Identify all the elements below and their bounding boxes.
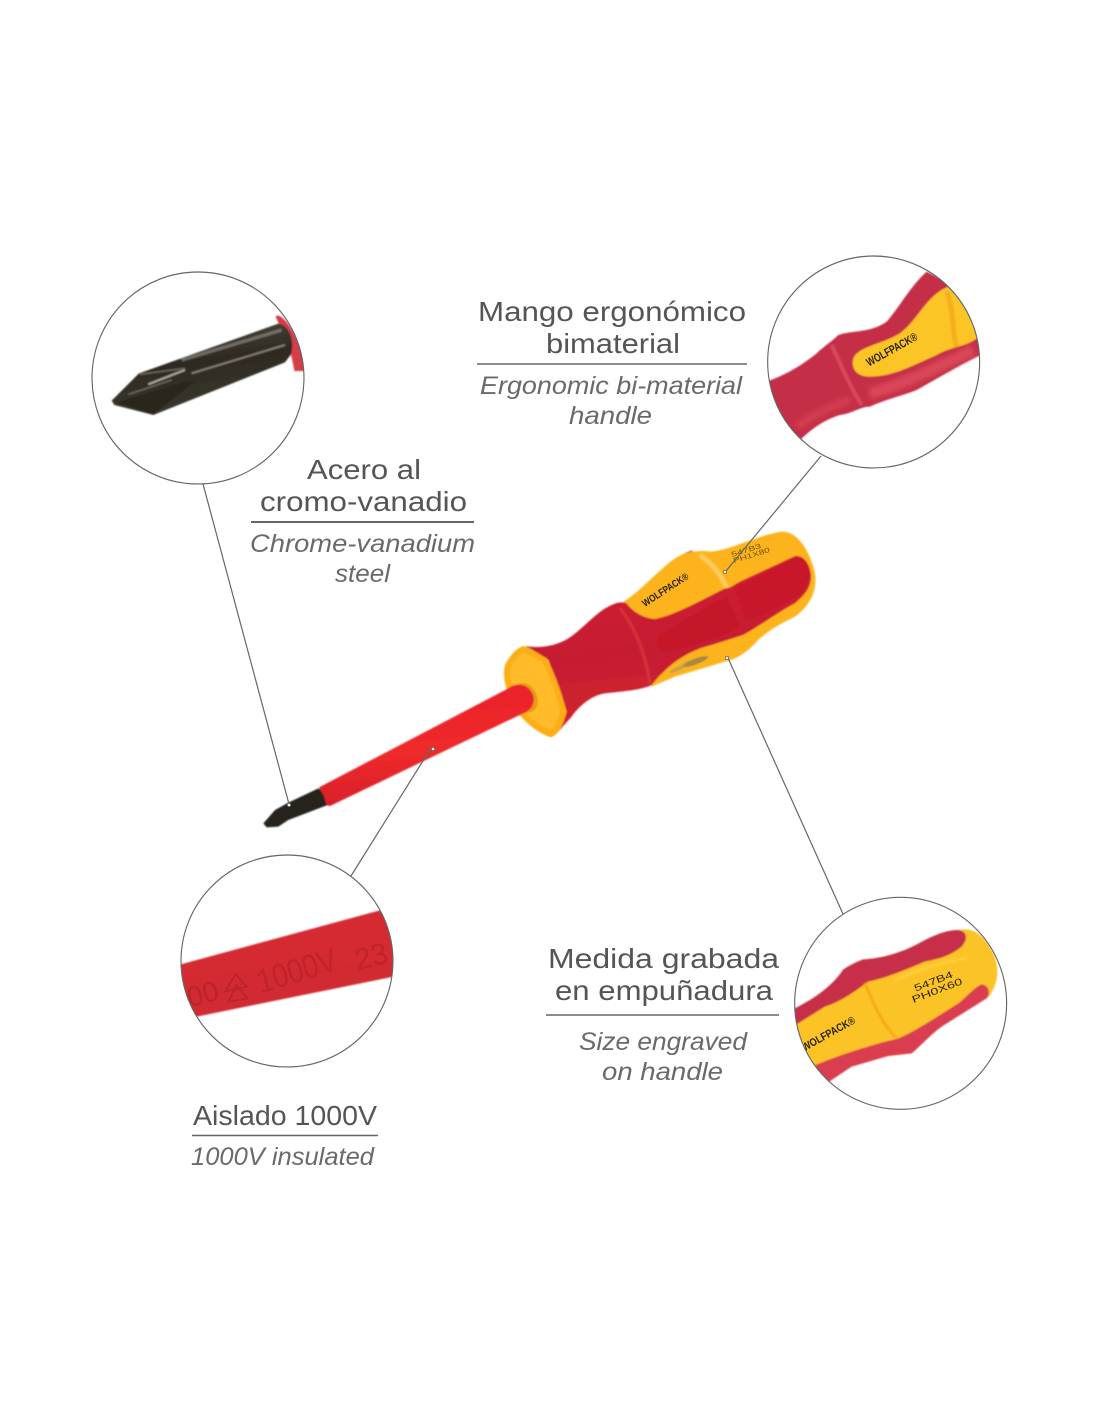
red handle body bbox=[770, 271, 979, 440]
attachment dots bbox=[287, 570, 729, 807]
Spanish heading: Acero al bbox=[307, 454, 421, 485]
leader line: steel tip bbox=[203, 484, 289, 804]
insulated red shaft bbox=[319, 685, 534, 806]
circle: steel tip close-up bbox=[92, 272, 308, 484]
steel bit bbox=[112, 324, 292, 415]
handle and collar bbox=[504, 532, 815, 737]
circle: insulation close-up bbox=[175, 855, 402, 1067]
size engraving on handle: 547B3 bbox=[731, 543, 762, 559]
Spanish heading line two: bimaterial bbox=[546, 328, 680, 359]
leader line: insulation bbox=[351, 748, 431, 876]
size engraving second line: PH1X80 bbox=[733, 547, 771, 565]
body crease bbox=[865, 983, 897, 1038]
caption: steel bbox=[250, 454, 475, 588]
Spanish heading: Medida grabada bbox=[548, 943, 779, 974]
English caption: Size engraved bbox=[579, 1028, 748, 1056]
size engraving second line: PH0X60 bbox=[910, 976, 964, 1006]
red tube bbox=[175, 909, 402, 1018]
top red sliver bbox=[663, 551, 702, 575]
Spanish heading: Aislado 1000V bbox=[193, 1100, 377, 1131]
lower left highlight bbox=[797, 400, 850, 427]
Spanish heading line two: cromo-vanadio bbox=[260, 486, 467, 517]
embossed voltage marking: 1000V bbox=[253, 942, 342, 1001]
engraved logo stamp bbox=[681, 654, 709, 669]
caption: engraved size bbox=[546, 943, 779, 1086]
collar face bbox=[510, 653, 560, 730]
English caption line two: steel bbox=[335, 560, 392, 588]
caption: handle bbox=[477, 296, 747, 430]
shaft socket shadow bbox=[509, 679, 542, 716]
shaft and tip bbox=[263, 685, 534, 827]
flute edge bbox=[128, 368, 185, 394]
red washer bbox=[276, 316, 308, 371]
leader line: engraved size bbox=[728, 658, 843, 914]
English caption: Chrome-vanadium bbox=[250, 530, 475, 558]
lower shine bbox=[192, 345, 285, 373]
caption: insulation bbox=[191, 1100, 378, 1171]
English caption line two: on handle bbox=[602, 1058, 723, 1086]
panel crease bbox=[947, 292, 957, 347]
English caption line two: handle bbox=[569, 402, 652, 430]
red handle and grip bbox=[525, 556, 811, 732]
brand text on handle: WOLFPACK® bbox=[641, 571, 692, 610]
screwdriver photo bbox=[263, 532, 815, 827]
top red band bbox=[795, 929, 967, 1025]
Spanish heading: Mango ergonómico bbox=[478, 296, 746, 327]
circle: handle close-up bbox=[767, 255, 980, 468]
ridge by panel bbox=[832, 345, 862, 405]
flute shadow bbox=[117, 382, 195, 414]
yellow body bbox=[623, 532, 815, 687]
embossed digits: 00 bbox=[184, 975, 222, 1014]
infographic canvas bbox=[91, 255, 1008, 1165]
upper shine bbox=[182, 330, 282, 360]
grip recess highlight bbox=[895, 958, 967, 980]
collar bbox=[504, 646, 567, 737]
flute gleam bbox=[148, 370, 185, 384]
English caption: 1000V insulated bbox=[191, 1143, 375, 1171]
brand text: WOLFPACK® bbox=[864, 330, 920, 369]
brand text: WOLFPACK® bbox=[800, 1015, 858, 1054]
middle grip shading bbox=[657, 596, 740, 652]
Spanish heading line two: en empuñadura bbox=[555, 975, 773, 1006]
size engraving: 547B4 bbox=[913, 969, 956, 994]
yellow crease highlight bbox=[700, 555, 727, 588]
steel tip bbox=[263, 788, 328, 827]
yellow body bbox=[796, 928, 998, 1066]
yellow logo panel bbox=[852, 286, 977, 378]
circle: engraved size close-up bbox=[785, 897, 1007, 1109]
English caption: Ergonomic bi-material bbox=[480, 372, 744, 400]
embossed warning triangles bbox=[225, 974, 248, 1002]
leader line: handle bbox=[726, 456, 821, 571]
lower highlight bbox=[870, 350, 973, 393]
red ring highlight bbox=[620, 608, 650, 683]
engraved logo stamp small bbox=[668, 663, 687, 675]
bottom red band bbox=[812, 984, 989, 1083]
rear grip shading bbox=[735, 557, 810, 620]
embossed digits right: 23 bbox=[351, 937, 392, 977]
